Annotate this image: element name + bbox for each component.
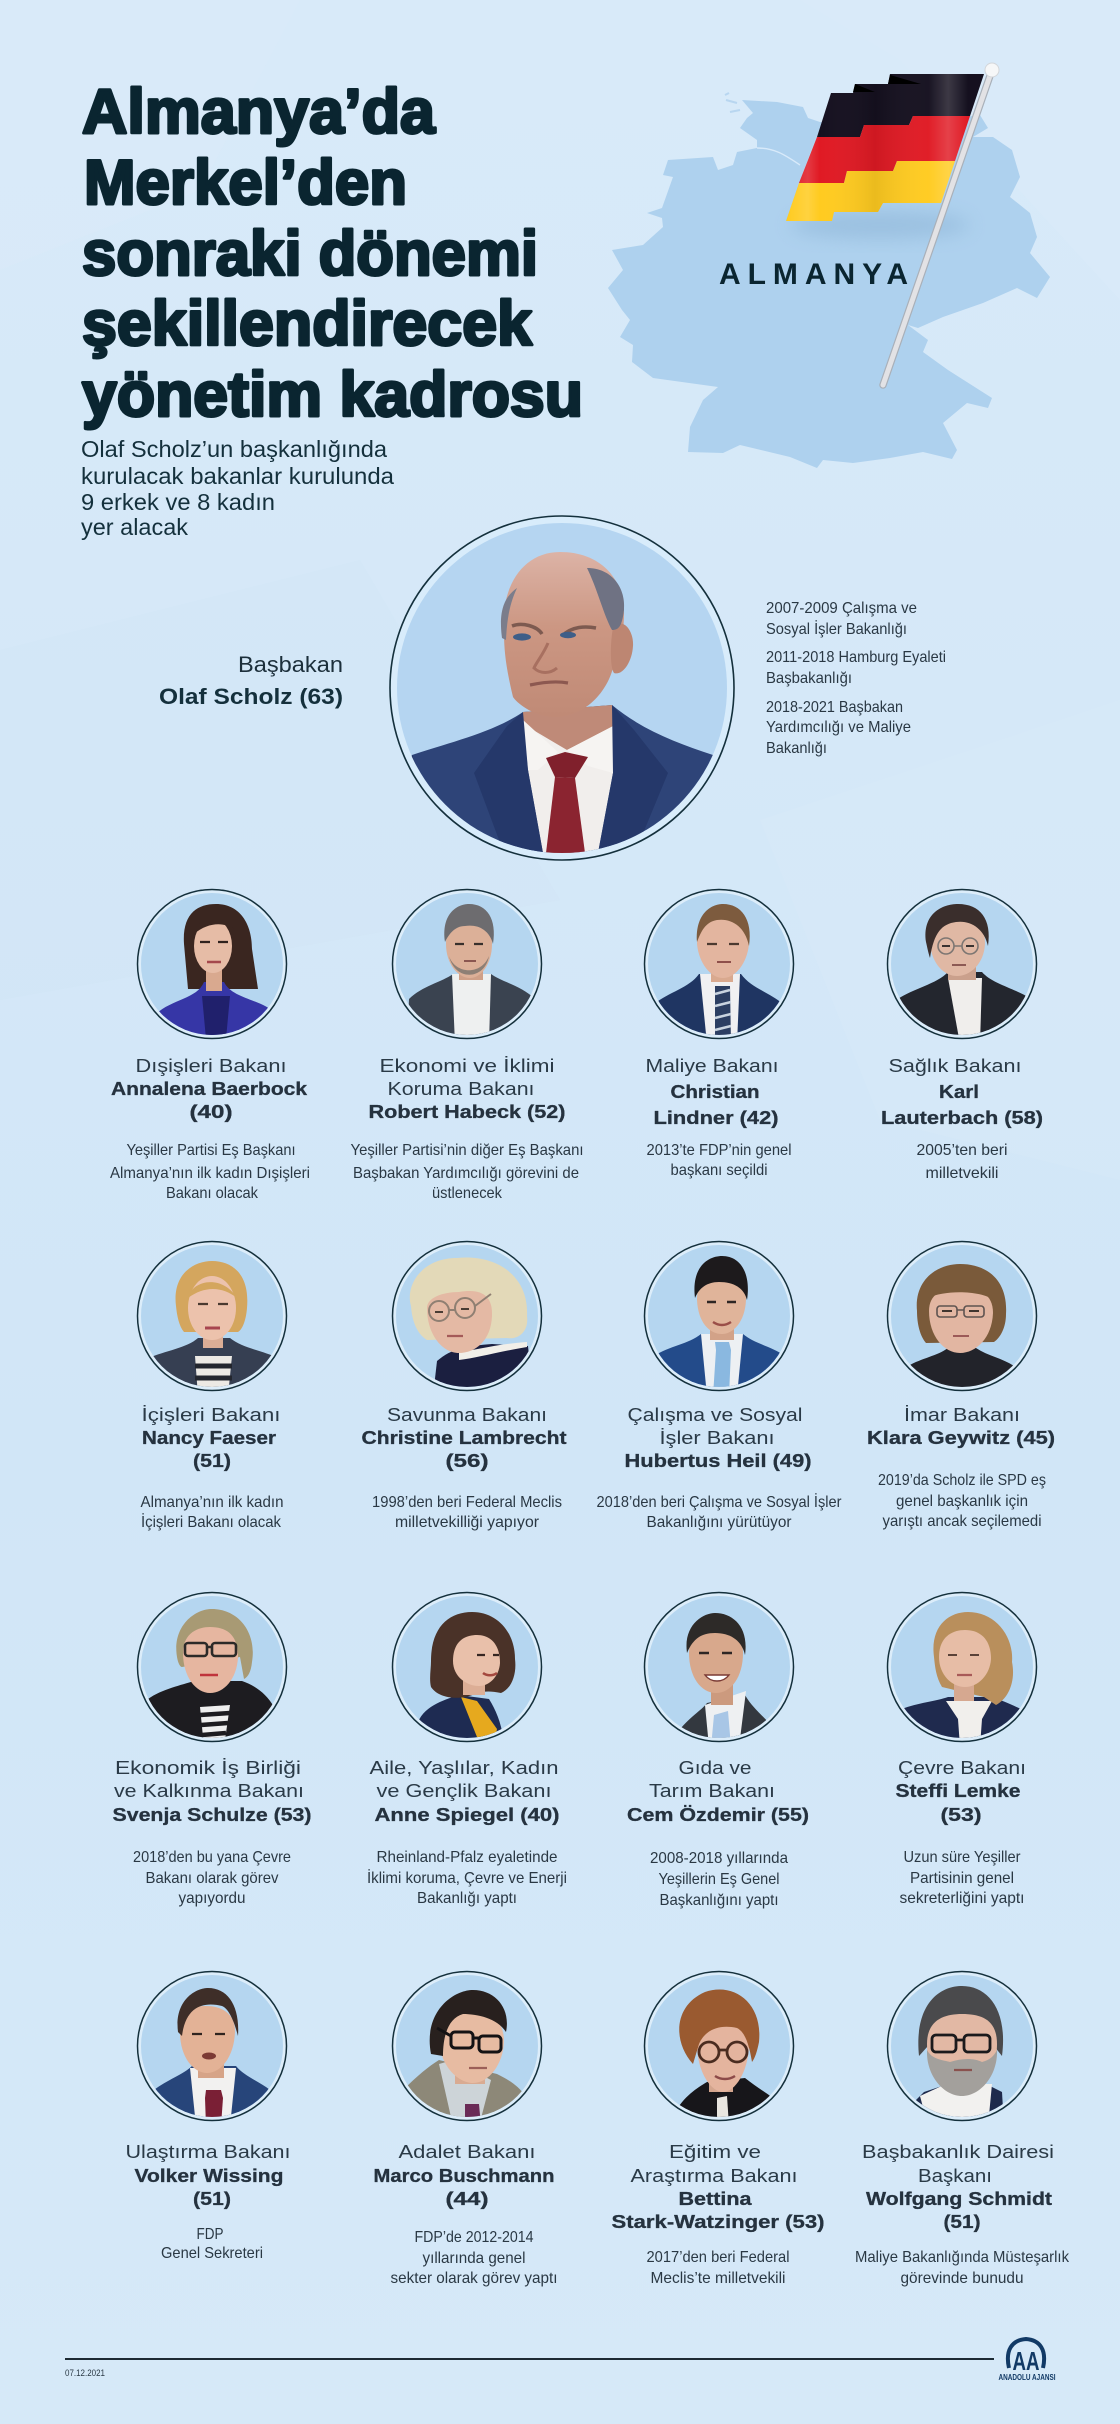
description: 2008-2018 yıllarında: [650, 1850, 788, 1867]
role: Gıda ve: [678, 1758, 752, 1778]
description: [110, 1142, 310, 1202]
name: Svenja Schulze (53): [112, 1804, 312, 1825]
name: Anne Spiegel (40): [374, 1804, 560, 1825]
card: Christine Lambrecht: [362, 1242, 566, 1531]
name: (51): [193, 2188, 231, 2209]
description: 2017’den beri Federal: [646, 2249, 790, 2266]
role: Sağlık Bakanı: [888, 1056, 1022, 1076]
logo: Anadolu Ajansı: ANADOLU AJANSI: [998, 2373, 1056, 2382]
card: Marco Buschmann: [374, 1972, 558, 2287]
role: Savunma Bakanı: [387, 1405, 547, 1425]
name: Nancy Faeser: [142, 1427, 276, 1448]
name: (44): [446, 2188, 488, 2209]
description: genel başkanlık için: [896, 1493, 1028, 1510]
description: [916, 1142, 1008, 1182]
description: yarıştı ancak seçilemedi: [882, 1513, 1042, 1530]
subtitle: yer alacak: [81, 514, 189, 540]
portrait: Robert Habeck: [392, 890, 542, 1044]
name: [362, 1427, 566, 1471]
description: [390, 2229, 558, 2287]
description: Başbakan Yardımcılığı görevini de: [353, 1165, 579, 1182]
description: Genel Sekreteri: [161, 2245, 263, 2262]
description: 2013’te FDP’nin genel: [646, 1142, 792, 1159]
subtitle: kurulacak bakanlar kurulunda: [81, 463, 394, 489]
name: Marco Buschmann: [374, 2165, 554, 2186]
name: [654, 1081, 778, 1128]
description: Meclis’te milletvekili: [650, 2270, 786, 2287]
description: 2018’den bu yana Çevre: [133, 1849, 291, 1866]
name: Cem Özdemir (55): [627, 1804, 809, 1825]
description: milletvekili: [926, 1165, 998, 1182]
chancellor label: [159, 652, 343, 709]
subtitle: 9 erkek ve 8 kadın: [81, 489, 275, 515]
card: Christian Lindner: [644, 890, 794, 1179]
description: Partisinin genel: [910, 1870, 1014, 1887]
name: (51): [944, 2211, 980, 2232]
card: Volker Wissing: [126, 1972, 290, 2262]
title: Merkel’den: [84, 148, 407, 218]
description: [646, 1142, 792, 1179]
role: [114, 1758, 304, 1801]
portrait: Christian Lindner: [644, 890, 794, 1044]
role: Aile, Yaşlılar, Kadın: [370, 1758, 558, 1778]
role: [628, 1405, 802, 1448]
name: (40): [190, 1101, 232, 1122]
description: sekreterliğini yaptı: [900, 1890, 1024, 1907]
description: Almanya’nın ilk kadın: [140, 1494, 284, 1511]
description: üstlenecek: [432, 1185, 503, 1202]
role: [630, 2142, 798, 2186]
portrait: Christine Lambrecht: [392, 1242, 542, 1396]
name: Klara Geywitz (45): [867, 1427, 1055, 1448]
title: Almanya’da: [82, 77, 436, 147]
map label: ALMANYA: [719, 258, 908, 291]
description: [133, 1849, 291, 1907]
card: Nancy Faeser: [138, 1242, 286, 1531]
description: 1998’den beri Federal Meclis: [372, 1494, 562, 1511]
name: [896, 1780, 1020, 1825]
card: Anne Spiegel: [367, 1592, 567, 1907]
portrait: Anne Spiegel: [392, 1592, 542, 1747]
card: Robert Habeck: [350, 890, 584, 1202]
portrait: Nancy Faeser: [138, 1242, 286, 1396]
description: Bakanı olarak görev: [146, 1870, 278, 1887]
portrait: Annalena Baerbock: [138, 890, 286, 1044]
card: Bettina Stark-Watzinger: [612, 1972, 824, 2287]
role: [380, 1056, 554, 1099]
name: [134, 2165, 284, 2209]
name: Hubertus Heil (49): [624, 1450, 812, 1471]
role: İmar Bakanı: [904, 1405, 1020, 1425]
name: Bettina: [678, 2188, 752, 2209]
description: [900, 1849, 1024, 1907]
name: [111, 1078, 308, 1122]
role: Maliye Bakanı: [646, 1056, 778, 1076]
subtitle: Olaf Scholz’un başkanlığında: [81, 436, 387, 462]
description: 2018’den beri Çalışma ve Sosyal İşler: [596, 1492, 842, 1511]
description: milletvekilliği yapıyor: [395, 1514, 540, 1531]
role: ve Gençlik Bakanı: [376, 1781, 552, 1801]
role: ve Kalkınma Bakanı: [114, 1781, 304, 1801]
description: İçişleri Bakanı olacak: [141, 1512, 282, 1531]
logo: Anadolu Ajansı: [998, 2339, 1056, 2382]
description: Yeşiller Partisi Eş Başkanı: [126, 1142, 296, 1159]
description: Yeşiller Partisi’nin diğer Eş Başkanı: [350, 1142, 584, 1159]
description: Yeşillerin Eş Genel: [658, 1871, 780, 1888]
portrait: Bettina Stark-Watzinger: [644, 1972, 794, 2126]
name: Christian: [670, 1081, 760, 1102]
portrait: Wolfgang Schmidt: [888, 1972, 1036, 2126]
description: Maliye Bakanlığında Müsteşarlık: [855, 2249, 1070, 2266]
map of Germany: [608, 93, 1050, 468]
name: Volker Wissing: [134, 2165, 284, 2186]
name: Karl: [939, 1081, 979, 1102]
role: Dışişleri Bakanı: [136, 1056, 286, 1076]
role: Çalışma ve Sosyal: [628, 1405, 802, 1425]
chancellor career text: Başbakanlığı: [766, 670, 852, 687]
name: Robert Habeck (52): [368, 1101, 566, 1122]
description: 2019’da Scholz ile SPD eş: [878, 1472, 1046, 1489]
role: Eğitim ve: [669, 2142, 761, 2162]
subtitle: [81, 436, 394, 540]
name: Lindner (42): [654, 1107, 778, 1128]
chancellor career text: 2007-2009 Çalışma ve: [766, 600, 917, 617]
description: [367, 1849, 567, 1907]
portrait: Svenja Schulze: [138, 1592, 286, 1747]
description: Almanya’nın ilk kadın Dışişleri: [110, 1165, 310, 1182]
description: başkanı seçildi: [670, 1162, 768, 1179]
card: Klara Geywitz: [867, 1242, 1055, 1530]
name: [612, 2188, 824, 2232]
description: yapıyordu: [178, 1890, 246, 1907]
description: [350, 1142, 584, 1202]
description: Başkanlığını yaptı: [660, 1892, 778, 1909]
name: Steffi Lemke: [896, 1780, 1020, 1801]
name: Wolfgang Schmidt: [866, 2188, 1052, 2209]
chancellor career text: Bakanlığı: [766, 740, 827, 757]
role: Araştırma Bakanı: [630, 2166, 798, 2186]
card: Hubertus Heil: [596, 1242, 842, 1531]
role: [862, 2142, 1054, 2186]
description: [878, 1472, 1046, 1530]
name: [866, 2188, 1052, 2232]
name: Stark-Watzinger (53): [612, 2211, 824, 2232]
title: [82, 77, 583, 430]
card: Wolfgang Schmidt: [855, 1972, 1070, 2287]
role: Tarım Bakanı: [649, 1781, 775, 1801]
role: Ekonomi ve İklimi: [380, 1056, 554, 1076]
title: yönetim kadrosu: [82, 360, 583, 430]
role: [370, 1758, 558, 1801]
description: Bakanı olacak: [166, 1185, 259, 1202]
description: [372, 1494, 562, 1531]
name: [142, 1427, 276, 1471]
portrait: Karl Lauterbach: [888, 890, 1036, 1044]
role: Başbakanlık Dairesi: [862, 2142, 1054, 2162]
role: İşler Bakanı: [660, 1428, 774, 1448]
description: Bakanlığı yaptı: [417, 1890, 517, 1907]
role: Adalet Bakanı: [398, 2142, 536, 2162]
name: (56): [446, 1450, 488, 1471]
card: Annalena Baerbock: [110, 890, 310, 1202]
role: Başkanı: [918, 2166, 992, 2186]
role: İçişleri Bakanı: [142, 1405, 280, 1425]
portrait: Olaf Scholz: [390, 516, 734, 868]
name: Lauterbach (58): [881, 1107, 1043, 1128]
role: Çevre Bakanı: [898, 1758, 1026, 1778]
name: [374, 2165, 554, 2209]
chancellor career text: 2018-2021 Başbakan: [766, 699, 903, 716]
role: Ulaştırma Bakanı: [126, 2142, 290, 2162]
description: Rheinland-Pfalz eyaletinde: [376, 1849, 558, 1866]
chancellor career text: [766, 600, 946, 757]
title: sonraki dönemi: [82, 219, 538, 289]
description: [161, 2226, 263, 2262]
chancellor label: Başbakan: [238, 652, 343, 677]
description: sekter olarak görev yaptı: [390, 2270, 558, 2287]
card: Svenja Schulze: [112, 1592, 312, 1907]
flag of Germany: [786, 63, 999, 385]
description: [596, 1492, 842, 1531]
title: şekillendirecek: [82, 289, 533, 359]
role: [649, 1758, 775, 1801]
portrait: Hubertus Heil: [644, 1242, 794, 1396]
portrait: Klara Geywitz: [888, 1242, 1036, 1396]
portrait: Marco Buschmann: [392, 1972, 542, 2126]
date: 07.12.2021: [65, 2368, 105, 2379]
card: Cem Özdemir: [627, 1592, 809, 1909]
card: Steffi Lemke: [888, 1592, 1036, 1907]
description: [646, 2249, 790, 2287]
chancellor career text: Sosyal İşler Bakanlığı: [766, 619, 907, 638]
description: yıllarında genel: [422, 2250, 526, 2267]
portrait: Steffi Lemke: [888, 1592, 1036, 1747]
chancellor career text: Yardımcılığı ve Maliye: [766, 719, 911, 736]
card: Karl Lauterbach: [881, 890, 1043, 1182]
chancellor career text: 2011-2018 Hamburg Eyaleti: [766, 649, 946, 666]
description: görevinde bunudu: [900, 2270, 1024, 2287]
description: 2005’ten beri: [916, 1142, 1008, 1159]
name: Christine Lambrecht: [362, 1427, 566, 1448]
portrait: Cem Özdemir: [644, 1592, 794, 1747]
portrait: Volker Wissing: [138, 1972, 286, 2126]
name: Annalena Baerbock: [111, 1078, 308, 1099]
name: (51): [193, 1450, 231, 1471]
name: (53): [940, 1804, 982, 1825]
chancellor label: Olaf Scholz (63): [159, 684, 343, 709]
description: Uzun süre Yeşiller: [904, 1849, 1021, 1866]
description: İklimi koruma, Çevre ve Enerji: [367, 1868, 567, 1887]
role: Ekonomik İş Birliği: [115, 1758, 301, 1778]
name: [881, 1081, 1043, 1128]
description: Bakanlığını yürütüyor: [646, 1514, 792, 1531]
logo: Anadolu Ajansı: AA: [1012, 2346, 1040, 2376]
description: [855, 2249, 1070, 2287]
description: FDP’de 2012-2014: [414, 2229, 534, 2246]
description: [140, 1494, 284, 1531]
description: FDP: [196, 2226, 224, 2243]
description: [650, 1850, 788, 1909]
role: Koruma Bakanı: [388, 1079, 534, 1099]
